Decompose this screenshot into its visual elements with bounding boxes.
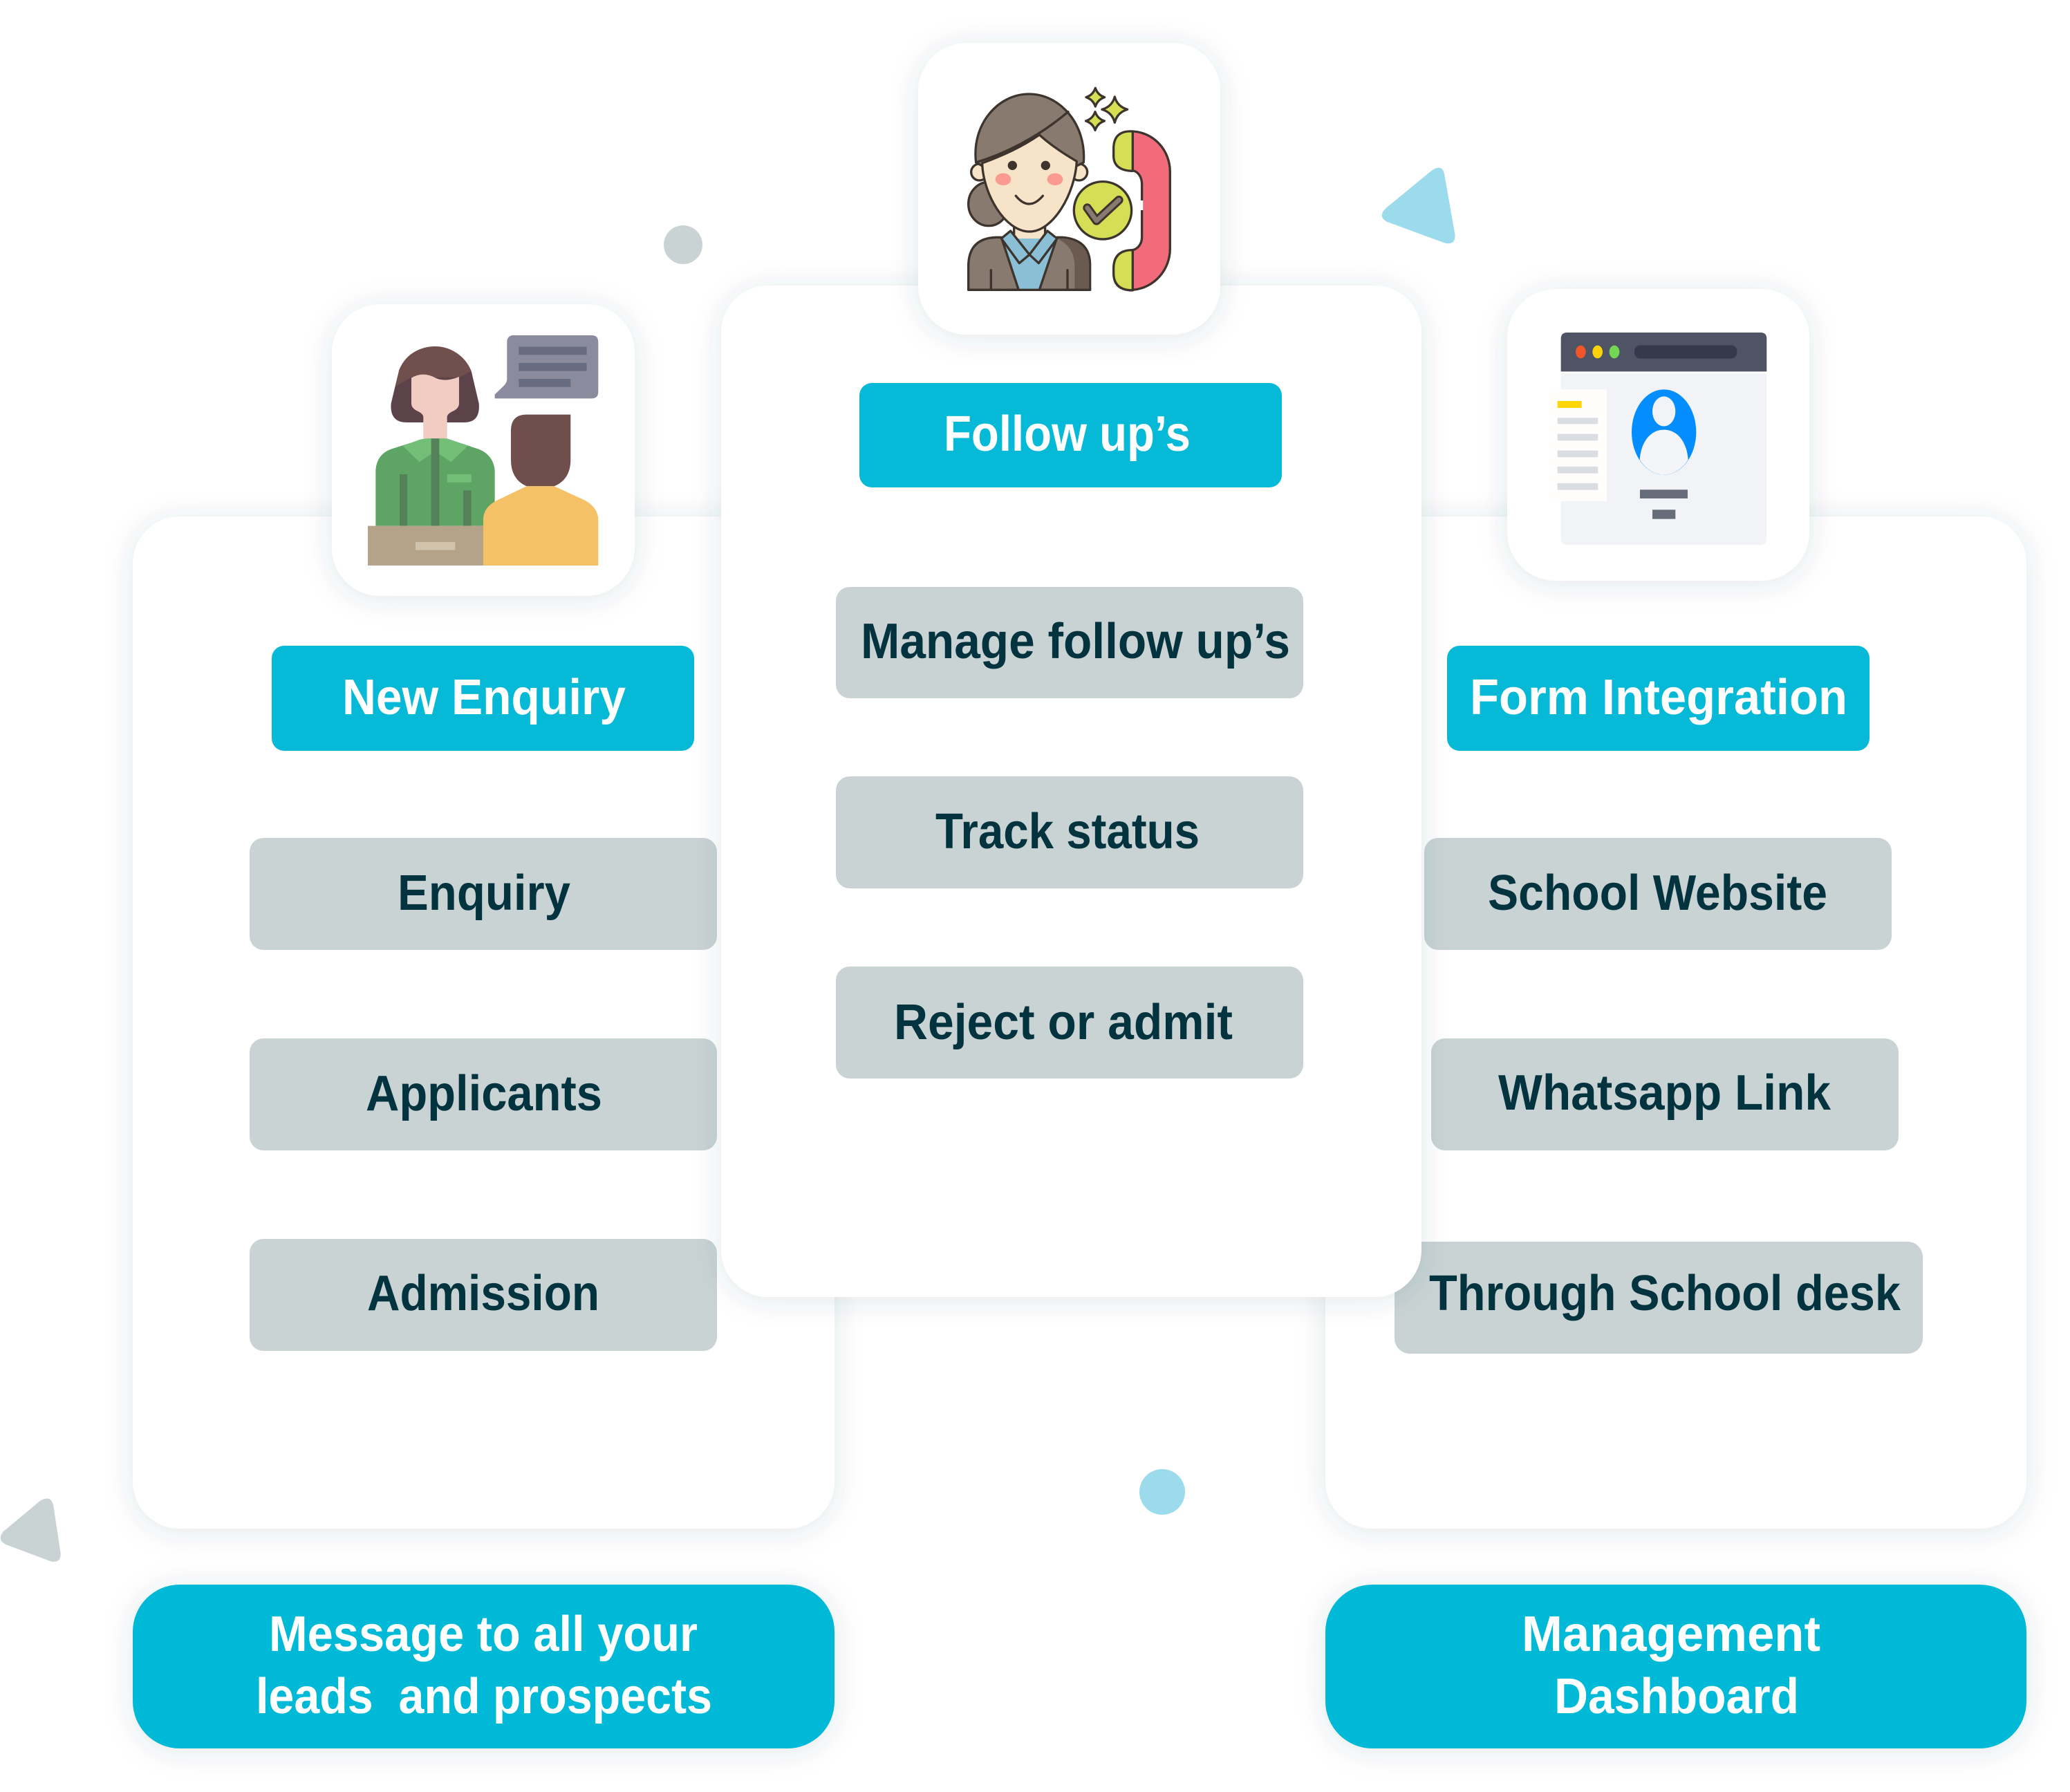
decorative blue circle — [1139, 1469, 1185, 1515]
item: School Website: School Website — [1488, 866, 1827, 921]
item: Whatsapp Link — [1431, 1038, 1899, 1150]
heading button: Follow ups: Follow up’s — [944, 407, 1191, 462]
heading button: New Enquiry — [272, 646, 694, 751]
callout: message to leads: leads and prospects — [256, 1669, 712, 1724]
icon card: receptionist — [332, 304, 635, 596]
panel card — [721, 286, 1421, 1297]
item: Whatsapp Link: Whatsapp Link — [1498, 1065, 1831, 1121]
item: Through School desk: Through School desk — [1429, 1266, 1901, 1321]
item: Reject or admit: Reject or admit — [894, 995, 1233, 1050]
decorative grey triangle — [1, 1499, 61, 1562]
decorative grey circle — [664, 225, 702, 264]
item: Track status — [836, 776, 1303, 888]
item: Track status: Track status — [935, 804, 1200, 859]
icon card: phone agent — [918, 43, 1220, 335]
item: Manage follow ups — [836, 587, 1303, 698]
decorative blue triangle — [1382, 168, 1455, 243]
icon card: browser profile — [1507, 289, 1809, 581]
item: Applicants: Applicants — [366, 1066, 602, 1121]
callout: message to leads — [133, 1585, 834, 1748]
heading button: New Enquiry: New Enquiry — [342, 670, 626, 725]
panel: follow ups — [721, 43, 1421, 1297]
icon: agent with phone and check mark — [969, 88, 1170, 290]
item: School Website — [1424, 838, 1892, 950]
icon: browser window with profile — [1549, 333, 1766, 545]
panel: new enquiry — [133, 304, 834, 1529]
callout: management dashboard: Management — [1522, 1607, 1820, 1662]
item: Enquiry: Enquiry — [398, 866, 570, 921]
heading button: Form Integration: Form Integration — [1470, 670, 1847, 725]
item: Manage follow ups: Manage follow up’s — [861, 614, 1290, 669]
panel card — [133, 516, 834, 1529]
heading button: Follow ups — [859, 383, 1282, 487]
callout: management dashboard: Dashboard — [1554, 1669, 1799, 1724]
heading button: Form Integration — [1447, 646, 1869, 751]
item: Admission: Admission — [367, 1266, 599, 1321]
icon: receptionist with visitor — [368, 335, 598, 566]
panel: form integration — [1325, 289, 2026, 1529]
item: Through School desk — [1395, 1242, 1923, 1354]
callout: message to leads: Message to all your — [269, 1607, 698, 1662]
item: Applicants — [250, 1038, 717, 1150]
item: Admission — [250, 1239, 717, 1351]
callout: management dashboard — [1325, 1585, 2026, 1748]
item: Reject or admit — [836, 967, 1303, 1079]
panel card — [1325, 516, 2026, 1529]
item: Enquiry — [250, 838, 717, 950]
